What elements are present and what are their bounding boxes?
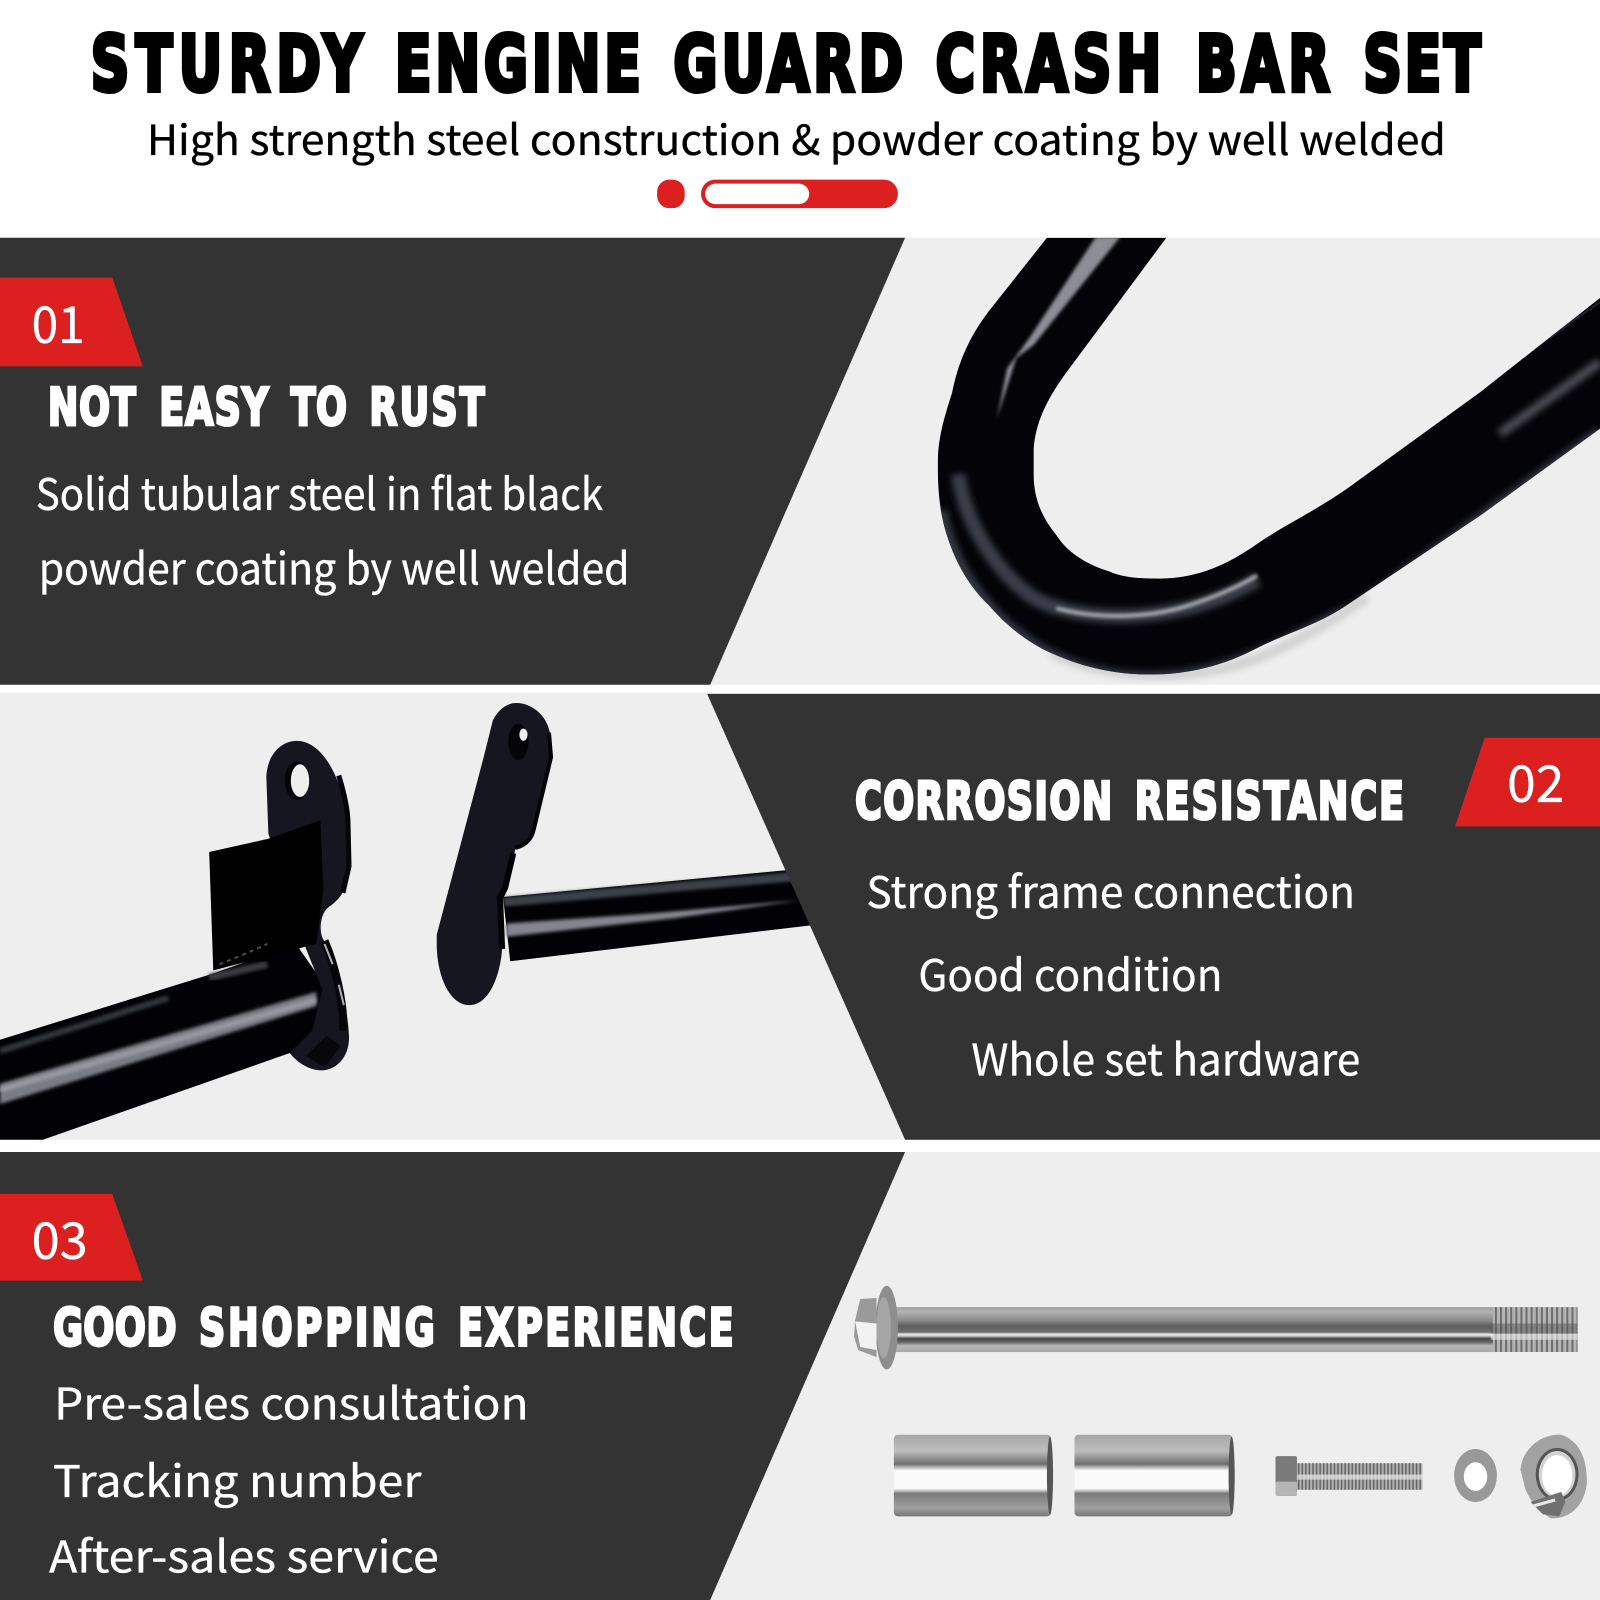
panel background [0,693,1600,1140]
title: STURDY [91,20,363,109]
upper highlight [997,237,1120,418]
decorative pill marker [657,180,898,208]
title: SET [1363,20,1481,109]
panel: corrosion resistance [0,693,1600,1140]
body text: Whole set hardware [971,1025,1360,1089]
panel background [0,238,1600,685]
body text: Tracking number [53,1446,422,1510]
body text: After-sales service [49,1521,439,1585]
long axle bolt [854,1286,1578,1369]
dark diagonal block [0,238,905,685]
body text [49,1368,529,1585]
heading: RUST [369,376,485,438]
spacer sleeves [894,1435,1235,1516]
body text [36,459,630,598]
subtitle: High strength steel construction & powder coating by well welded [147,107,1446,168]
title: GUARD [674,20,903,109]
right tube sheen [1500,362,1600,434]
badge 02: 02 [1507,743,1564,817]
badge 02 [1455,738,1600,827]
badge 03 [0,1194,143,1281]
body text: Solid tubular steel in flat black [36,459,603,523]
lower sweep highlight [958,474,1257,616]
panel background [0,1152,1600,1600]
heading: EXPERIENCE [458,1297,734,1358]
left tube [0,944,327,1140]
photo: tube brackets [0,703,827,1140]
dark diagonal block [0,1152,905,1600]
right bracket [437,703,552,1005]
badge 01: 01 [32,284,85,358]
title [91,20,1481,109]
washer [1454,1449,1497,1502]
heading: SHOPPING [199,1297,435,1358]
heading: TO [291,376,347,438]
panel: not easy to rust [0,238,1600,685]
heading: CORROSION [855,770,1112,832]
title: ENGINE [395,20,641,109]
right tube [503,867,827,961]
heading [48,376,485,438]
heading [855,770,1404,832]
heading [53,1297,734,1358]
panel: good shopping experience [0,1152,1600,1600]
heading: RESISTANCE [1135,770,1404,832]
body text: Pre-sales consultation [54,1368,529,1432]
badge 03: 03 [32,1200,88,1274]
body text [866,857,1360,1089]
outer rim sheen [941,433,1600,678]
body text: Strong frame connection [866,857,1355,921]
flange nut [1520,1435,1587,1518]
title: BAR [1196,20,1330,109]
heading: NOT [48,376,136,438]
photo: hardware set [854,1286,1587,1518]
body text: Good condition [918,940,1222,1004]
photo: bent black tube [938,238,1600,682]
dark diagonal block [707,694,1600,1140]
body text: powder coating by well welded [39,534,630,598]
badge 01 [0,278,143,366]
heading: GOOD [53,1297,177,1358]
left bracket plate [266,741,349,1070]
heading: EASY [159,376,269,438]
small bolt [1276,1456,1422,1496]
title: CRASH [936,20,1161,109]
